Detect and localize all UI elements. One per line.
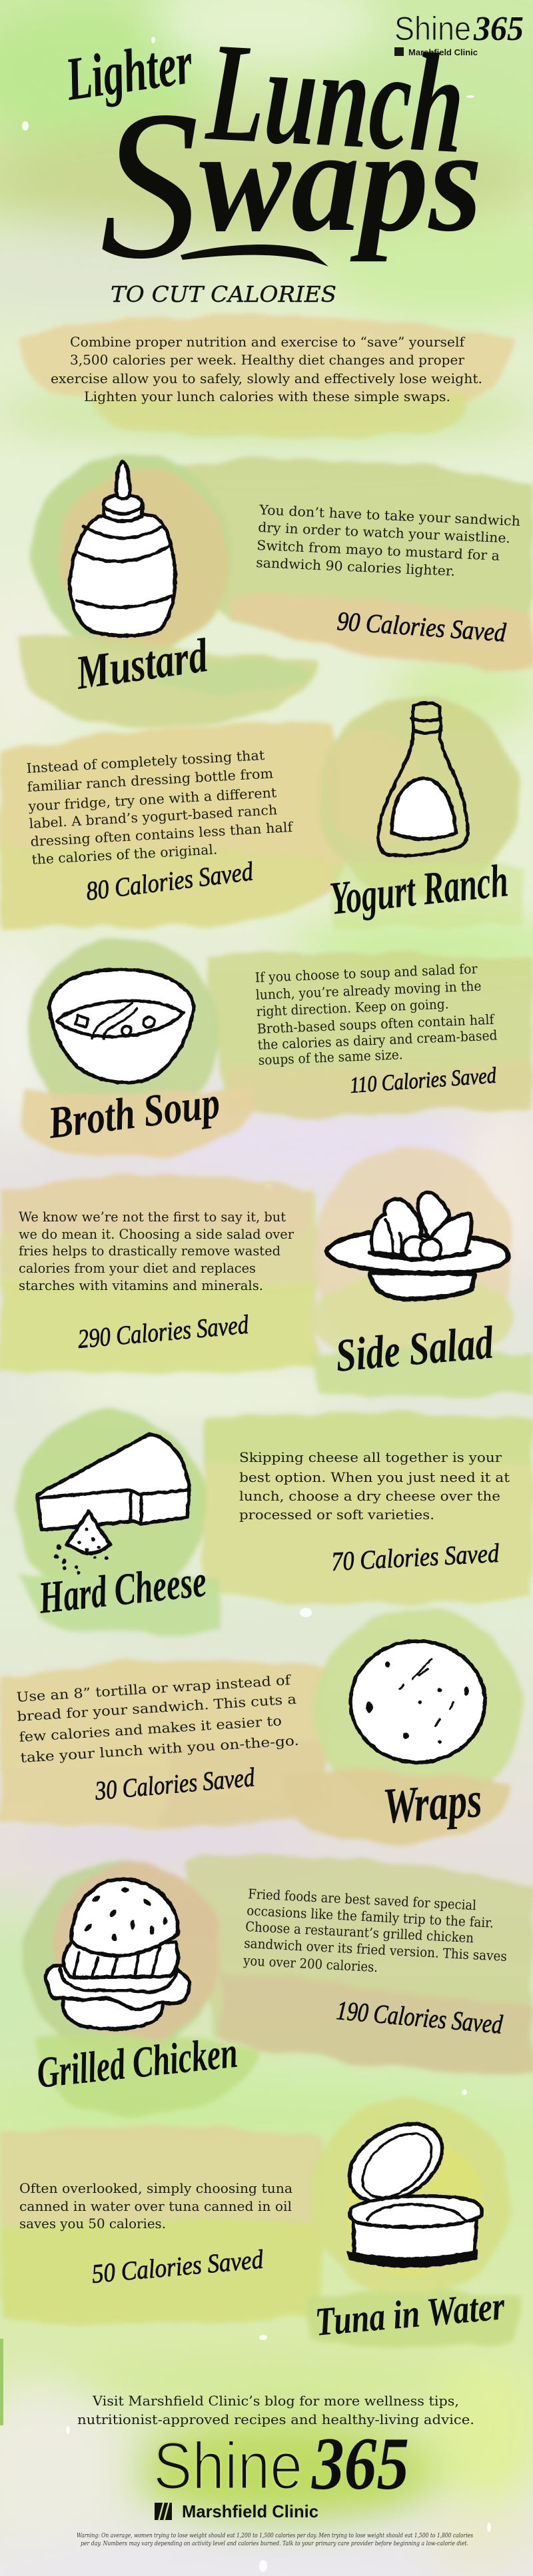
text: salad description: calories from your diet and replaces: [19, 1260, 256, 1276]
header logo: Shine365 Marshfield Clinic: Shine: [394, 10, 471, 47]
footer call to action: [77, 2393, 474, 2427]
text: salad description: [19, 1209, 294, 1293]
text: ranch description: [26, 747, 294, 868]
text: mustard description: Switch from mayo to mustard for a: [257, 537, 500, 564]
heading: mustard: Mustard: [72, 628, 211, 700]
text: salad description: fries helps to drastically remove wasted: [19, 1243, 280, 1259]
title: Lighter Lunch Swaps: S: [100, 67, 199, 303]
text: ranch description: dressing often contains less than half: [30, 819, 294, 850]
text: mustard description: [256, 502, 521, 579]
text: mustard description: dry in order to watch your waistline.: [258, 519, 510, 546]
text: cheese description: best option. When you just need it at: [239, 1469, 510, 1485]
panel: broth soup: [21, 938, 533, 1157]
panel: yogurt ranch: [0, 696, 526, 930]
heading: wraps: Wraps: [381, 1772, 484, 1834]
footer logo: Shine365 Marshfield Clinic: Shine: [153, 2429, 302, 2503]
text: soup description: lunch, you’re already moving in the: [255, 977, 482, 1003]
text: chicken description: sandwich over its fried version. This saves: [244, 1935, 507, 1964]
text: ranch description: label. A brand’s yogurt-based ranch: [29, 802, 278, 832]
text: soup description: the calories as dairy and cream-based: [257, 1027, 498, 1053]
text: tuna description: saves you 50 calories.: [19, 2216, 166, 2232]
text: tuna description: Often overlooked, simply choosing tuna: [19, 2180, 292, 2196]
icon: tortilla wrap: [350, 1641, 485, 1762]
text: wraps description: take your lunch with you on-the-go.: [20, 1732, 299, 1766]
title: Lighter Lunch Swaps: waps: [199, 99, 482, 263]
heading: hard cheese: Hard Cheese: [36, 1555, 209, 1623]
footer call to action: Visit Marshfield Clinic’s blog for more wellness tips,: [92, 2393, 459, 2409]
footer logo: Shine365 Marshfield Clinic: Marshfield Clinic: [182, 2501, 318, 2521]
header logo: Shine365 Marshfield Clinic: Marshfield Clinic: [408, 47, 478, 57]
text: chicken description: Choose a restaurant’s grilled chicken: [245, 1918, 474, 1946]
text: intro paragraph: 3,500 calories per week. Healthy diet changes and proper: [70, 352, 464, 368]
text: ranch description: familiar ranch dressing bottle from: [27, 765, 274, 795]
text: soup description: If you choose to soup and salad for: [255, 961, 478, 985]
text: mustard description: sandwich 90 calories lighter.: [256, 554, 456, 579]
footer logo: Shine365 Marshfield Clinic: 365: [311, 2423, 409, 2505]
panel: wraps: [0, 1608, 522, 1842]
footer call to action: nutritionist-approved recipes and healthy-living advice.: [77, 2411, 474, 2427]
subtitle: to cut calories: TO CUT CALORIES: [111, 281, 336, 307]
header logo: Shine365 Marshfield Clinic: 365: [473, 10, 524, 48]
text: chicken description: you over 200 calories.: [243, 1952, 378, 1975]
text: cheese description: lunch, choose a dry cheese over the: [239, 1488, 500, 1504]
title: Lighter Lunch Swaps: [61, 13, 482, 303]
text: salad description: we do mean it. Choosing a side salad over: [19, 1226, 294, 1242]
icon: cheese wedge: [37, 1434, 189, 1574]
text: soup description: [255, 961, 498, 1068]
text: chicken description: occasions like the family trip to the fair.: [247, 1902, 494, 1931]
text: soup description: soups of the same size.: [258, 1046, 403, 1068]
text: ranch description: your fridge, try one with a different: [27, 784, 277, 814]
panel: tuna in water: [0, 2099, 520, 2349]
text: cheese description: [239, 1449, 510, 1523]
text: salad description: starches with vitamins and minerals.: [19, 1277, 263, 1293]
callout: 110 calories saved: 110 Calories Saved: [349, 1063, 498, 1098]
panel: hard cheese: [16, 1412, 533, 1633]
text: ranch description: Instead of completely tossing that: [26, 747, 265, 776]
icon: soup bowl: [49, 969, 194, 1083]
text: mustard description: You don’t have to take your sandwich: [259, 502, 521, 529]
text: wraps description: [16, 1672, 299, 1766]
text: wraps description: few calories and makes it easier to: [19, 1712, 282, 1745]
heading: grilled chicken: Grilled Chicken: [35, 2028, 240, 2098]
footnote: warning: [77, 2532, 473, 2547]
text: wraps description: bread for your sandwich. This cuts a: [17, 1691, 297, 1724]
text: tuna description: canned in water over tuna canned in oil: [19, 2198, 292, 2214]
text: ranch description: the calories of the original.: [31, 841, 218, 868]
title: Lighter Lunch Swaps: Lighter: [61, 28, 197, 113]
text: wraps description: Use an 8” tortilla or wrap instead of: [16, 1672, 292, 1705]
icon: salad plate: [326, 1193, 508, 1299]
callout: 70 calories saved: 70 Calories Saved: [330, 1538, 500, 1577]
callout: 80 calories saved: 80 Calories Saved: [85, 856, 255, 906]
text: chicken description: [243, 1886, 507, 1975]
heading: broth soup: Broth Soup: [45, 1077, 223, 1148]
panel: grilled chicken: [23, 1855, 533, 2118]
text: soup description: Broth-based soups often contain half: [257, 1011, 495, 1037]
icon: Marshfield cross mark: [155, 2501, 172, 2521]
callout: 50 calories saved: 50 Calories Saved: [91, 2244, 265, 2289]
text: chicken description: Fried foods are best saved for special: [248, 1886, 477, 1913]
text: tuna description: [19, 2180, 292, 2232]
panel: side salad: [0, 1146, 533, 1396]
text: intro paragraph: exercise allow you to safely, slowly and effectively lose weight.: [51, 370, 482, 386]
text: salad description: We know we’re not the first to say it, but: [19, 1209, 286, 1225]
icon: tuna can: [335, 2108, 482, 2268]
callout: 30 calories saved: 30 Calories Saved: [93, 1762, 257, 1806]
text: intro paragraph: Combine proper nutrition and exercise to “save” yourself: [70, 334, 466, 350]
text: intro paragraph: Lighten your lunch calories with these simple swaps.: [84, 388, 450, 404]
text: cheese description: processed or soft varieties.: [239, 1507, 434, 1523]
text: cheese description: Skipping cheese all together is your: [239, 1449, 502, 1465]
header logo: Shine365 Marshfield Clinic: [394, 10, 524, 57]
panel: intro: [20, 313, 513, 437]
text: intro paragraph: [51, 334, 482, 404]
panel: mustard: [20, 454, 533, 730]
text: soup description: right direction. Keep on going.: [256, 995, 449, 1019]
callout: 290 calories saved: 290 Calories Saved: [77, 1309, 251, 1354]
footer logo: Shine365 Marshfield Clinic: [153, 2423, 409, 2521]
icon: ranch bottle: [378, 703, 468, 856]
icon: chicken sandwich: [46, 1879, 190, 2029]
icon: mustard bottle: [70, 462, 175, 636]
callout: 90 calories saved: 90 Calories Saved: [336, 606, 508, 648]
